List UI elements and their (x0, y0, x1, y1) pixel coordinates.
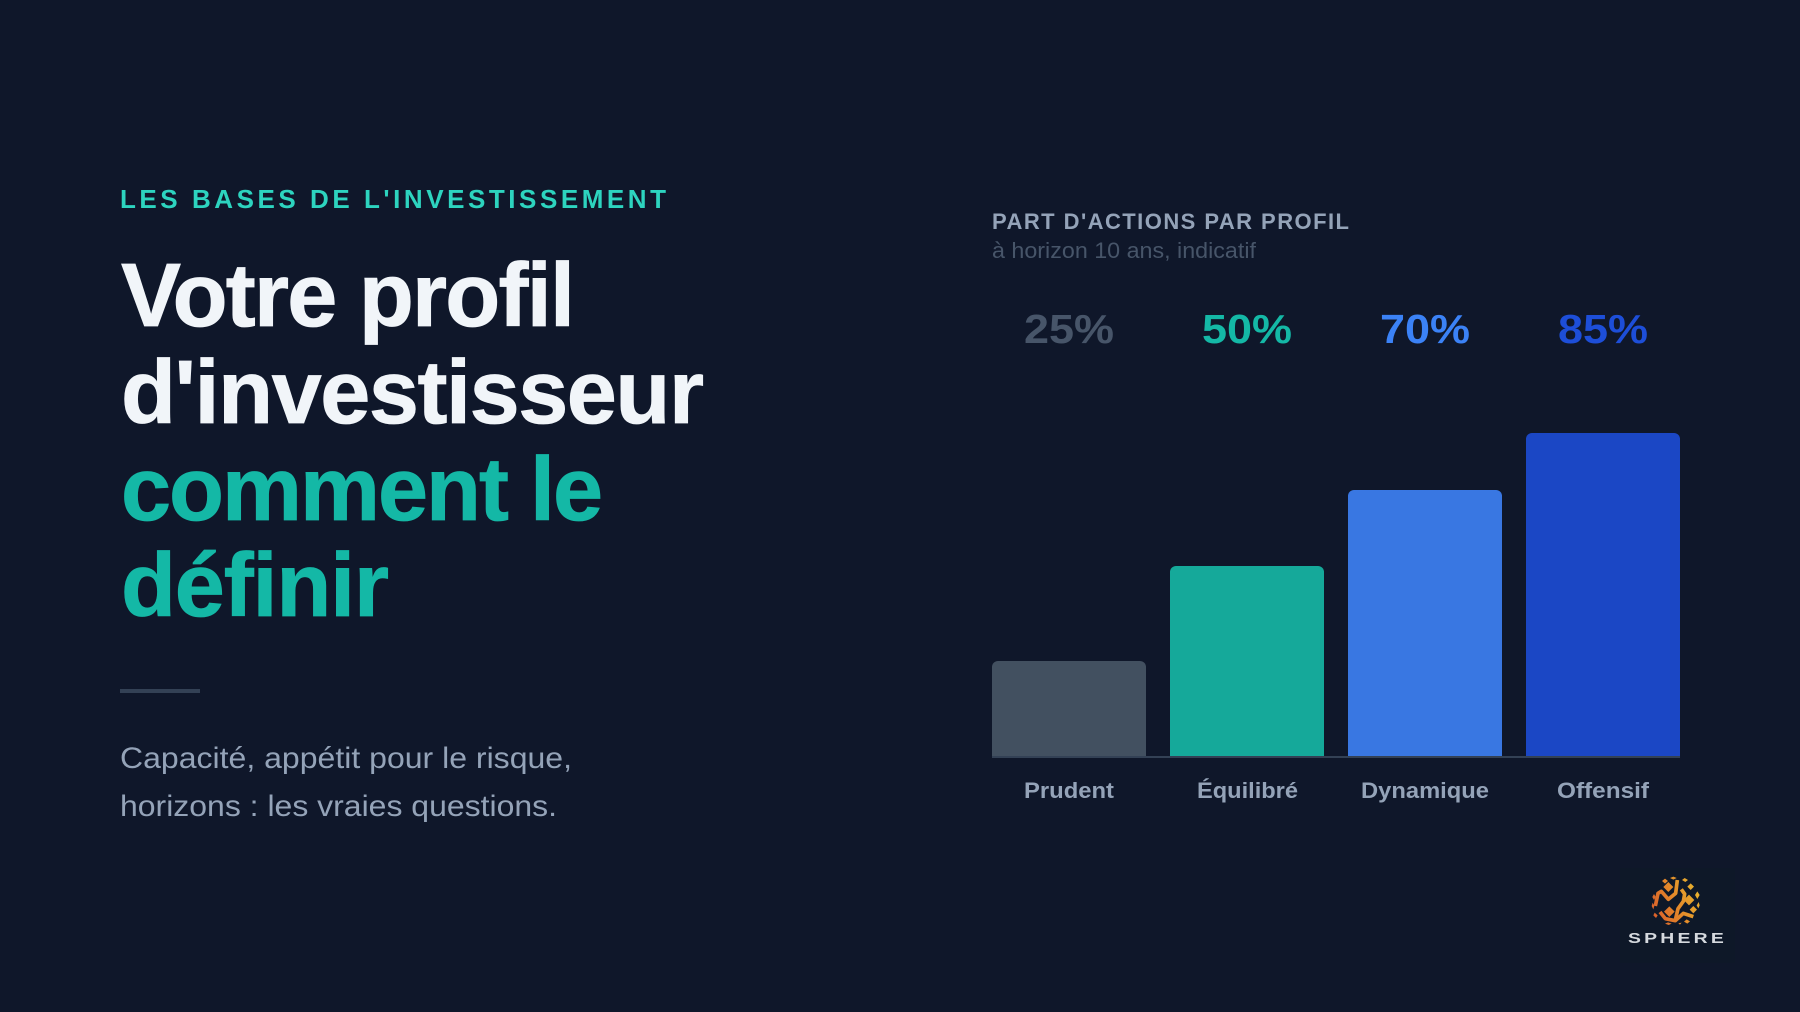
title line 2: d'investisseur (121, 343, 704, 443)
value: 85%: 85% (1558, 306, 1648, 352)
title (121, 246, 704, 636)
icon: sphere (1652, 877, 1700, 925)
bar: Prudent (992, 661, 1146, 756)
chart panel: equity share by profile (992, 209, 1680, 803)
label: Dynamique: Dynamique (1361, 778, 1489, 803)
value: 50%: 50% (1202, 306, 1292, 352)
title line 3: comment le (121, 440, 603, 540)
bar: Équilibré (1170, 566, 1324, 756)
chart title: PART D'ACTIONS PAR PROFIL (992, 209, 1349, 234)
value: 70%: 70% (1380, 306, 1470, 352)
description line 1: Capacité, appétit pour le risque, (120, 742, 572, 775)
bar: Dynamique (1348, 490, 1502, 756)
logo: Sphere (1620, 868, 1735, 963)
title line 1: Votre profil (121, 246, 575, 346)
label: Offensif: Offensif (1557, 778, 1650, 803)
bar: Offensif (1526, 433, 1680, 756)
description (120, 742, 572, 823)
value: 25%: 25% (1024, 306, 1114, 352)
chart subtitle: à horizon 10 ans, indicatif (992, 238, 1257, 263)
description line 2: horizons : les vraies questions. (120, 790, 557, 823)
logo wordmark: SPHERE (1628, 930, 1727, 947)
label: Équilibré: Équilibré (1197, 778, 1298, 803)
label: Prudent: Prudent (1024, 778, 1115, 803)
title line 4: définir (121, 536, 389, 636)
eyebrow: LES BASES DE L'INVESTISSEMENT (120, 184, 666, 214)
